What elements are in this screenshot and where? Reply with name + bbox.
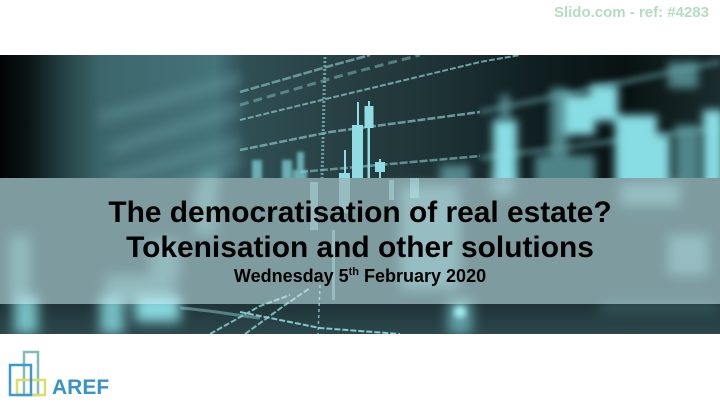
logo: AREF wordmark: AREF [52,376,109,399]
logo: blue tower [10,365,31,395]
translucent title band [0,178,720,304]
pale candles under the band [310,178,419,300]
blurred candles, right, clipped above the band [434,56,720,178]
sharp candlesticks [339,101,385,180]
teal base under the band [0,178,720,304]
blurred shapes under the band, left [10,172,220,303]
bright candles [486,78,720,178]
glow point [454,306,466,318]
lower reflection floor [0,304,720,334]
hero image: blurred trading candlestick chart [0,55,720,334]
title line 1: The democratisation of real estate? [108,196,612,229]
logo: teal tower [24,352,38,395]
blurred grid lines, right [480,62,720,158]
title line 2: Tokenisation and other solutions [126,231,594,264]
reflected candles and lines in the floor [14,296,720,334]
date: Wednesday 5th February 2020 [234,266,486,286]
title block [108,196,612,286]
logo: yellow block [17,380,45,395]
blurred candlesticks, centre [252,152,307,200]
mid-tone candles [434,56,704,178]
shapes under the band, right [400,173,708,290]
dashed grid lines, centre [240,55,520,178]
reference tag: Slido.com - ref: #4283 [554,4,709,21]
AREF logo [8,350,109,399]
blurred grid lines, left [100,78,240,215]
